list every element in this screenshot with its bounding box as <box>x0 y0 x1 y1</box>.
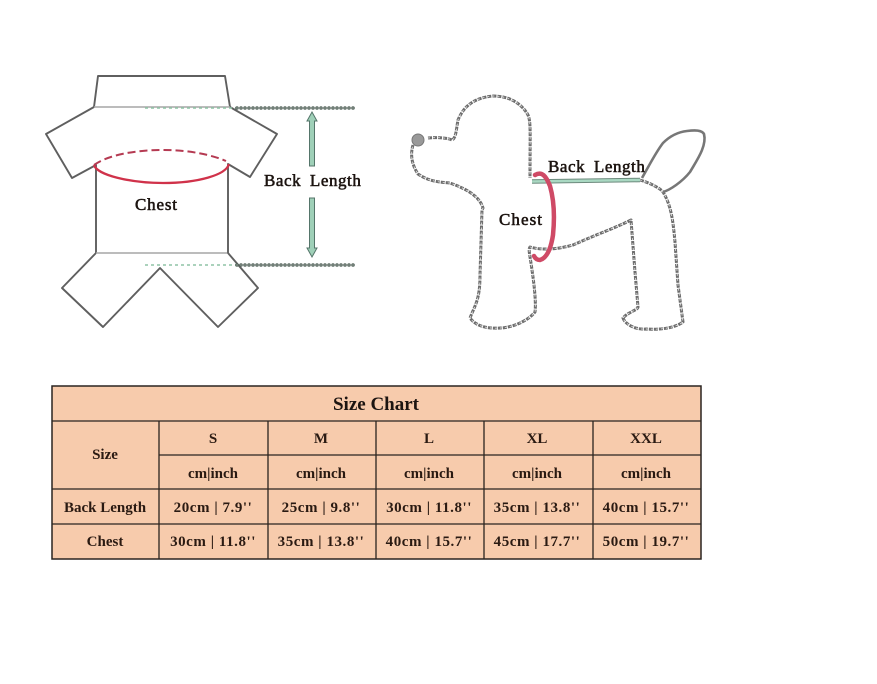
size chart table <box>52 386 701 559</box>
row: chest: 35cm | 13.8'' <box>278 534 364 550</box>
row: back length: 30cm | 11.8'' <box>386 500 472 516</box>
diagram: flat garment <box>46 76 361 327</box>
chest strap <box>534 174 554 260</box>
top measure line <box>145 107 355 109</box>
back length bar <box>532 180 640 182</box>
back length label: Back Length <box>548 157 645 176</box>
tail <box>642 130 705 192</box>
row: back length <box>64 500 689 516</box>
arrow: up <box>307 112 317 166</box>
header row: sizes: M <box>314 431 328 447</box>
back length label: Back Length <box>264 171 361 190</box>
row: chest: 30cm | 11.8'' <box>170 534 256 550</box>
arrow: down <box>307 198 317 257</box>
nose <box>412 134 424 146</box>
header row: units <box>188 466 672 482</box>
row: back length: 35cm | 13.8'' <box>494 500 580 516</box>
header row: units: cm|inch <box>296 466 347 482</box>
row: back length: 40cm | 15.7'' <box>603 500 689 516</box>
row: chest: 50cm | 19.7'' <box>603 534 689 550</box>
garment outline <box>46 76 277 327</box>
row: chest: 40cm | 15.7'' <box>386 534 472 550</box>
chest measurement ellipse <box>94 150 229 183</box>
table title: Size Chart <box>333 394 420 415</box>
header row: units: cm|inch <box>188 466 239 482</box>
row: chest: 45cm | 17.7'' <box>494 534 580 550</box>
header row: sizes: XL <box>527 431 547 447</box>
table background <box>52 386 701 559</box>
header row: sizes: L <box>424 431 434 447</box>
header row: units: cm|inch <box>621 466 672 482</box>
dog body outline <box>412 96 683 329</box>
diagram: dog silhouette <box>412 96 705 329</box>
row: chest: Chest <box>87 534 123 550</box>
header row: units: cm|inch <box>404 466 455 482</box>
header row: units: cm|inch <box>512 466 563 482</box>
row: back length: 25cm | 9.8'' <box>282 500 360 516</box>
chest label: Chest <box>135 195 177 214</box>
row: chest <box>87 534 689 550</box>
header row: sizes: XXL <box>630 431 662 447</box>
header row: sizes: S <box>209 431 217 447</box>
row: back length: 20cm | 7.9'' <box>174 500 252 516</box>
header row: sizes: Size <box>92 447 118 463</box>
chest label: Chest <box>499 210 542 229</box>
table grid <box>52 421 701 559</box>
row: back length: Back Length <box>64 500 147 516</box>
bottom measure line <box>145 264 355 266</box>
header row: sizes <box>92 431 662 463</box>
